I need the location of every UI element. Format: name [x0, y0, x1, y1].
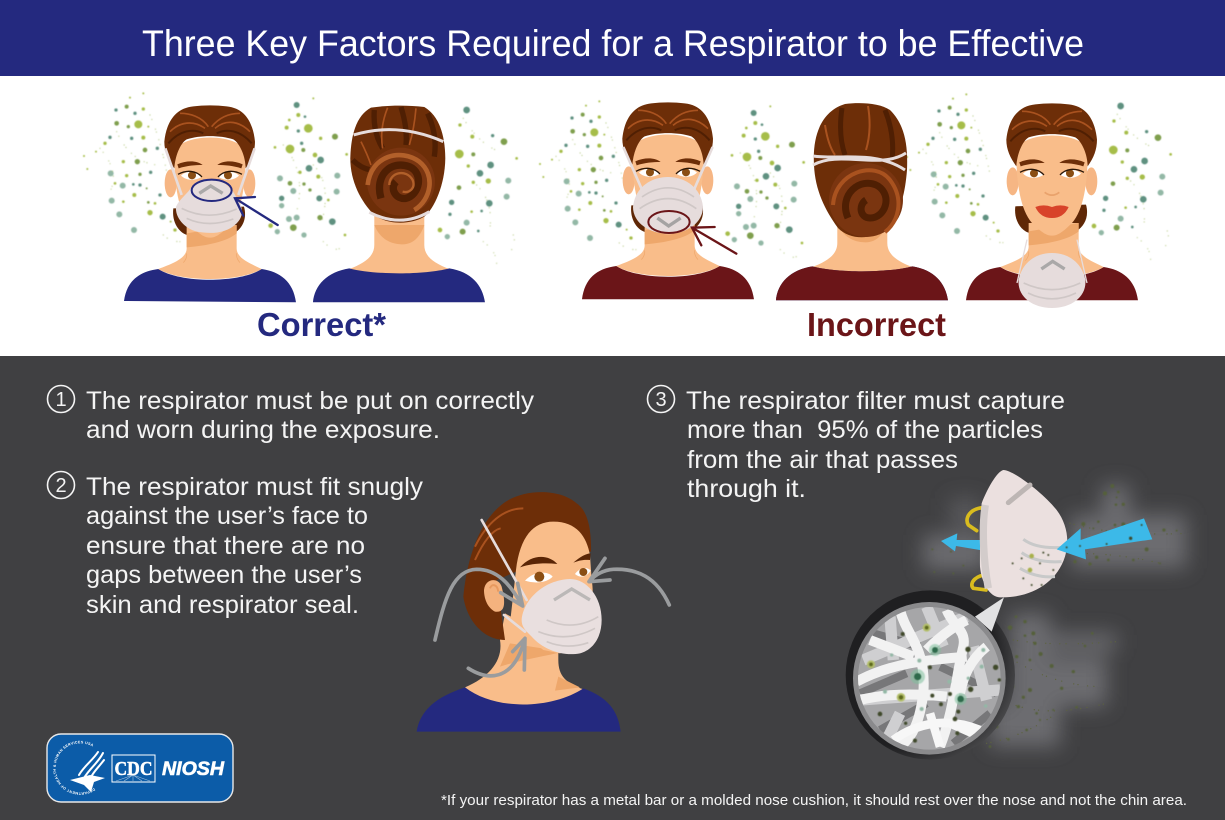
figure: correct back view with straps [313, 106, 485, 302]
CDC mark: CDC [114, 758, 152, 780]
factor 2: against the user’s face to [86, 502, 368, 530]
upper strap [354, 130, 443, 142]
lower strap [369, 212, 429, 220]
factor 2: skin and respirator seal. [86, 591, 359, 619]
page background [0, 0, 1225, 356]
upstream and downstream particles [931, 484, 1178, 748]
factor 2 [48, 472, 424, 619]
factor 2: gaps between the user’s [86, 561, 362, 589]
figure: incorrect front view with mask under nose [582, 102, 754, 299]
mask: worn over nose and chin [176, 179, 242, 233]
factor 3: through it. [687, 475, 806, 503]
strap [1017, 240, 1087, 283]
particles at mask surface [1012, 552, 1054, 586]
factor 3: The respirator filter must capture [686, 387, 1065, 415]
factor 3: from the air that passes [687, 446, 958, 474]
title banner [0, 0, 1225, 76]
factor 1 [48, 386, 535, 444]
arrow: chin error [692, 227, 736, 254]
logo: HHS, CDC, NIOSH [46, 733, 234, 803]
factor 2: ensure that there are no [86, 532, 365, 560]
factor 3: 3 [655, 389, 667, 411]
yellow ear loops [967, 508, 991, 590]
factor 2: The respirator must fit snugly [86, 473, 424, 501]
incoming blue arrow [1057, 518, 1152, 559]
figure: incorrect front view with mask around neck [966, 103, 1138, 308]
NIOSH mark: NIOSH [162, 759, 225, 780]
mask, side view [522, 579, 602, 654]
respirator side view [980, 470, 1067, 597]
figure: incorrect back view with crossed straps [776, 103, 948, 300]
factor 1: and worn during the exposure. [86, 416, 440, 444]
crossed straps [813, 153, 906, 170]
figure: correct front view with mask over nose [124, 105, 296, 302]
arrows: seal check points [435, 558, 669, 676]
hair bun, low [829, 163, 903, 237]
arrow: nose seal [235, 197, 278, 225]
hair bun [367, 148, 435, 216]
factor 1: 1 [55, 389, 67, 411]
lower dark panel [0, 356, 1225, 820]
figure: filter particle capture [846, 470, 1187, 760]
label: Incorrect: Incorrect [807, 306, 946, 343]
lips [1035, 205, 1069, 218]
haze behind particles [923, 485, 1187, 747]
figure: profile view showing snug fit [417, 492, 669, 732]
factor 2: 2 [55, 475, 67, 497]
factor 1: The respirator must be put on correctly [86, 387, 535, 415]
particle clouds: correct [83, 92, 518, 263]
factor 3 [648, 386, 1065, 503]
particle clouds: incorrect [539, 93, 1172, 259]
footnote: *If your respirator has a metal bar or a molded nose cushion, it should rest over the nose and not the chin area. [441, 793, 1187, 809]
mask: covering chin [633, 177, 703, 234]
HHS seal: DEPARTMENT OF HEALTH & HUMAN SERVICES USA [53, 740, 96, 795]
label: Correct: Correct* [257, 306, 386, 343]
title banner: Three Key Factors Required for a Respirator to be Effective [142, 23, 1084, 64]
magnified fiber lens [846, 590, 1015, 760]
outgoing blue arrow [941, 533, 983, 551]
factor 3: more than 95% of the particles [687, 416, 1043, 444]
mask hanging on neck [1019, 253, 1085, 308]
straps [482, 520, 527, 632]
nose [1045, 192, 1059, 195]
